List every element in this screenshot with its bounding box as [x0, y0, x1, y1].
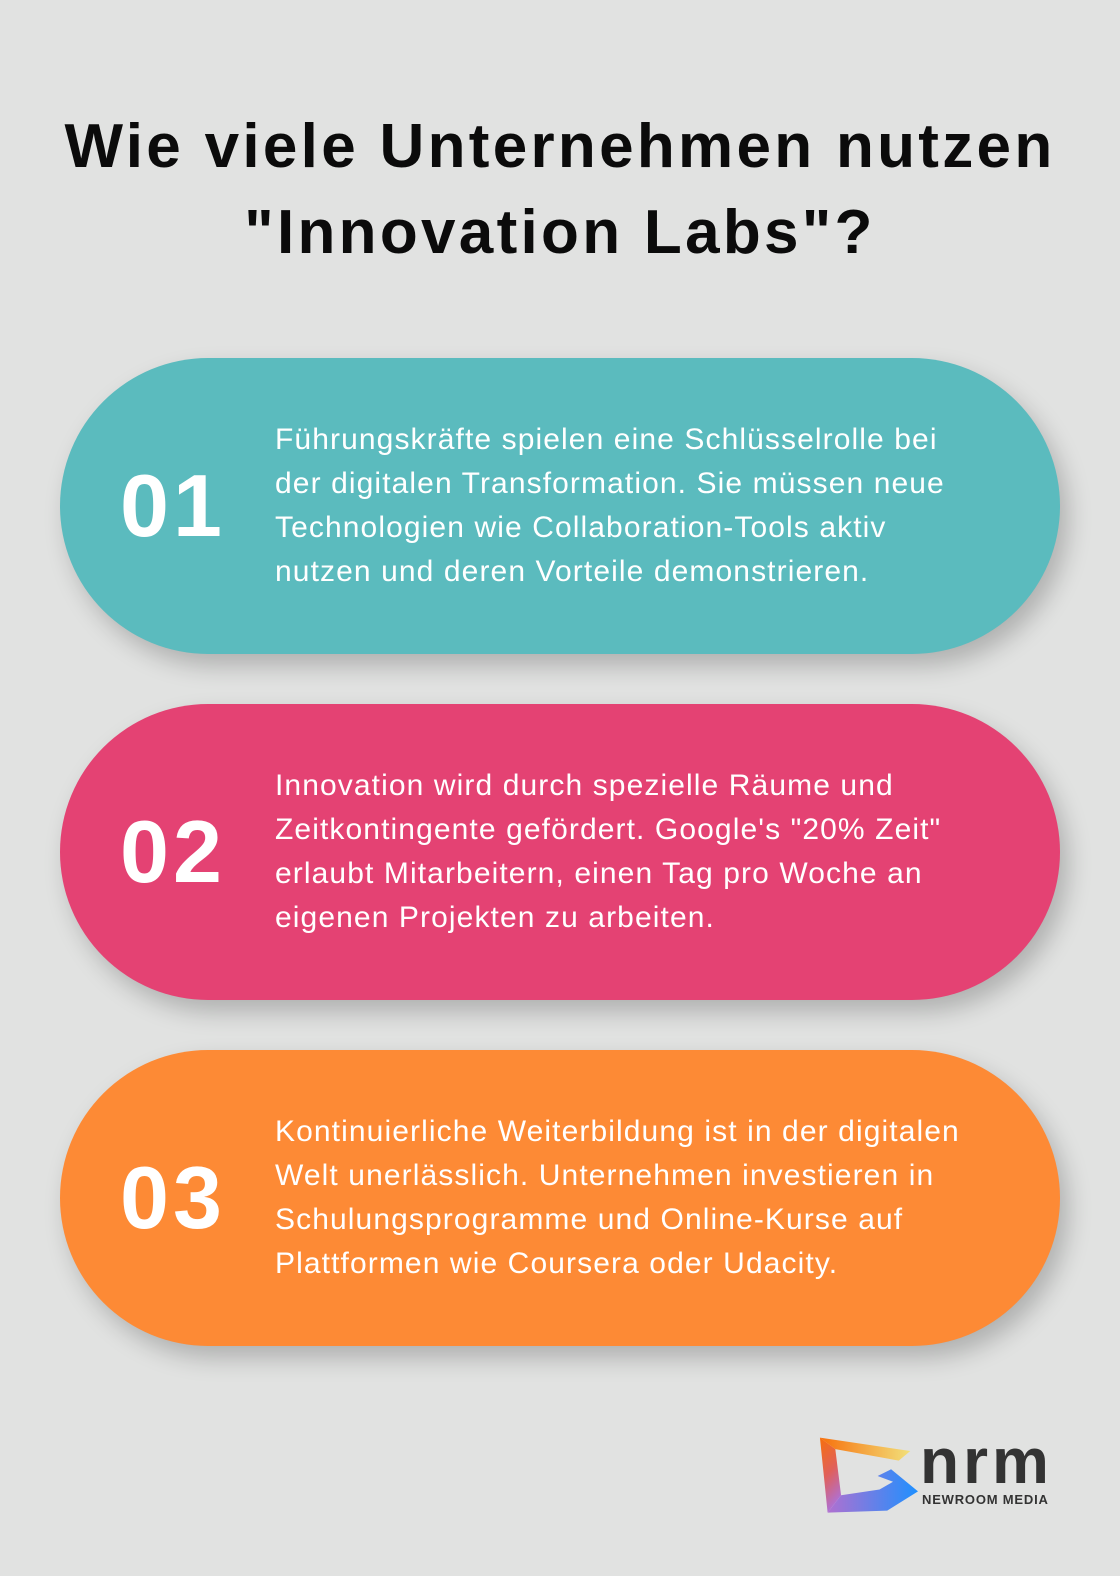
panel: 03	[60, 1050, 1060, 1346]
logo: NEWROOM MEDIA	[922, 1492, 1049, 1507]
text 01: der digitalen Transformation. Sie müssen neue	[275, 467, 945, 500]
title	[64, 112, 1056, 267]
logo	[820, 1425, 1053, 1513]
text 03	[275, 1115, 960, 1280]
text 03: Plattformen wie Coursera oder Udacity.	[275, 1247, 838, 1280]
text 02: eigenen Projekten zu arbeiten.	[275, 901, 715, 934]
text 01	[275, 423, 945, 588]
text 02: erlaubt Mitarbeitern, einen Tag pro Woche an	[275, 857, 923, 890]
panel: 02	[60, 704, 1060, 1000]
title: Wie viele Unternehmen nutzen	[64, 112, 1056, 181]
logo text: nrm	[920, 1425, 1053, 1497]
panel: 01	[60, 358, 1060, 654]
text 01: Führungskräfte spielen eine Schlüsselrolle bei	[275, 423, 938, 456]
text 03: Welt unerlässlich. Unternehmen investieren in	[275, 1159, 934, 1192]
number 03: 03	[120, 1148, 226, 1247]
text 02	[275, 769, 941, 934]
number 01: 01	[120, 456, 226, 555]
text 02: Zeitkontingente gefördert. Google's "20% Zeit"	[275, 813, 941, 846]
title: "Innovation Labs"?	[244, 198, 876, 267]
icon: logo mark	[820, 1438, 918, 1513]
text 03: Kontinuierliche Weiterbildung ist in der digitalen	[275, 1115, 960, 1148]
text 02: Innovation wird durch spezielle Räume und	[275, 769, 894, 802]
text 01: nutzen und deren Vorteile demonstrieren.	[275, 555, 869, 588]
text 03: Schulungsprogramme und Online-Kurse auf	[275, 1203, 903, 1236]
text 01: Technologien wie Collaboration-Tools aktiv	[275, 511, 887, 544]
number 02: 02	[120, 802, 226, 901]
